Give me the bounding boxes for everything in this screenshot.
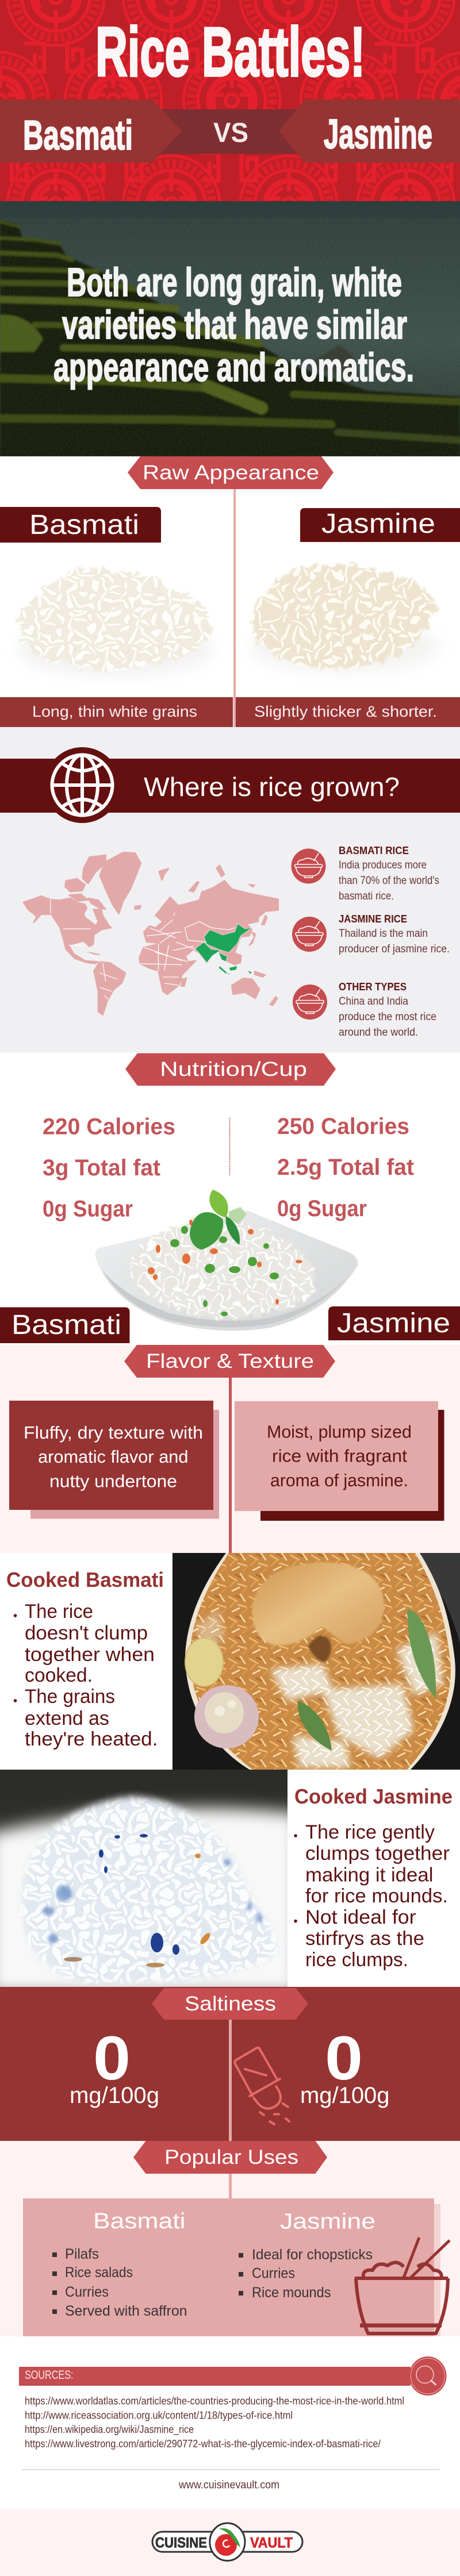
list: basmati uses: Pilafs xyxy=(65,2246,99,2262)
bullet list: together when xyxy=(25,1644,155,1666)
legend: basmati rice: India produces more xyxy=(339,859,427,871)
card: basmati flavor xyxy=(9,1401,219,1518)
nutrition facts: basmati: 3g Total fat xyxy=(43,1155,160,1181)
bullet list: they're heated. xyxy=(25,1728,158,1750)
bullet list: making it ideal xyxy=(305,1864,434,1886)
heading band xyxy=(0,759,460,813)
card: basmati flavor: Fluffy, dry texture with xyxy=(24,1422,203,1443)
icon: salt shaker xyxy=(235,2048,289,2124)
rice terrace photo with intro text xyxy=(0,201,460,456)
bullet list: stirfrys as the xyxy=(305,1928,424,1950)
stat: jasmine saltiness: mg/100g xyxy=(300,2083,390,2108)
caption: jasmine xyxy=(236,697,460,727)
list: basmati uses: Rice salads xyxy=(65,2264,133,2281)
footer xyxy=(0,2509,460,2576)
bullet list: The grains xyxy=(25,1686,115,1708)
heading: Cooked Jasmine xyxy=(294,1785,453,1808)
list: jasmine uses: Ideal for chopsticks xyxy=(252,2247,373,2263)
versus label: VS xyxy=(213,118,248,148)
heading pill: Popular Uses: Popular Uses xyxy=(164,2146,298,2169)
list: jasmine uses xyxy=(239,2247,373,2301)
nutrition facts: basmati: 220 Calories xyxy=(43,1114,175,1139)
tab: Basmati: Basmati xyxy=(12,1310,121,1340)
list: basmati uses xyxy=(52,2246,187,2319)
list: jasmine uses: Rice mounds xyxy=(252,2285,331,2301)
tab: Jasmine xyxy=(300,508,460,542)
sources bar: SOURCES: xyxy=(25,2369,74,2382)
section: raw appearance xyxy=(0,456,460,727)
photo: jasmine rice mound xyxy=(0,1770,288,1987)
list: jasmine uses: Curries xyxy=(252,2266,295,2282)
bullet list: rice clumps. xyxy=(305,1949,408,1971)
source links: https://en.wikipedia.org/wiki/Jasmine_rice xyxy=(25,2424,194,2436)
heading: Cooked Basmati xyxy=(6,1568,164,1591)
nutrition facts: jasmine: 0g Sugar xyxy=(277,1196,367,1221)
heading pill: Saltiness xyxy=(152,1988,308,2020)
stat: basmati saltiness xyxy=(70,2023,159,2108)
heading pill: Flavor & Texture: Flavor & Texture xyxy=(146,1350,314,1372)
legend: jasmine rice: Thailand is the main xyxy=(339,928,428,940)
heading pill: Saltiness: Saltiness xyxy=(185,1993,276,2015)
centre divider xyxy=(233,489,236,727)
logo: Cuisine Vault xyxy=(152,2523,302,2560)
nutrition facts: basmati: 0g Sugar xyxy=(43,1197,133,1222)
section: nutrition xyxy=(0,1052,460,1345)
bullet list: doesn't clump xyxy=(25,1622,148,1644)
card: jasmine flavor xyxy=(235,1401,444,1521)
ribbon right: Jasmine xyxy=(279,99,460,163)
section: saltiness xyxy=(0,1987,460,2141)
legend: basmati rice xyxy=(339,845,439,902)
photo: rice on white plate xyxy=(95,1190,358,1345)
icon: globe xyxy=(44,747,120,823)
bullet list: extend as xyxy=(25,1708,109,1729)
source links: https://www.worldatlas.com/articles/the-countries-producing-the-most-rice-in-the-world.html xyxy=(25,2396,404,2407)
source links xyxy=(25,2396,404,2450)
column heading: Basmati: Basmati xyxy=(93,2209,185,2233)
heading pill: Popular Uses xyxy=(133,2141,327,2174)
bullet list: clumps together xyxy=(305,1843,450,1864)
bullet list: cooked. xyxy=(25,1664,93,1686)
bullet list: for rice mounds. xyxy=(305,1885,448,1907)
nutrition facts: jasmine: 2.5g Total fat xyxy=(277,1155,414,1180)
ribbon centre band xyxy=(155,109,305,154)
column heading: Jasmine: Jasmine xyxy=(280,2209,375,2233)
header banner xyxy=(0,0,460,201)
legend: other types: around the world. xyxy=(339,1026,418,1039)
icon: bowl, jasmine xyxy=(292,917,327,952)
photo: biryani on plate xyxy=(172,1553,460,1770)
tab: Basmati xyxy=(0,507,161,543)
legend: jasmine rice: JASMINE RICE xyxy=(339,913,407,925)
panel: uses xyxy=(23,2198,450,2336)
legend: other types: produce the most rice xyxy=(339,1011,436,1023)
legend: other types: China and India xyxy=(339,995,408,1008)
source links: https://www.livestrong.com/article/290772-what-is-the-glycemic-index-of-basmati-rice/ xyxy=(25,2438,381,2450)
legend: other types xyxy=(339,981,436,1039)
caption: jasmine: Slightly thicker & shorter. xyxy=(254,703,437,720)
sources bar xyxy=(19,2367,411,2386)
photo: raw basmati rice pile xyxy=(15,566,214,675)
legend: basmati rice: basmati rice. xyxy=(339,890,394,902)
section: flavor and texture xyxy=(0,1345,460,1553)
tab: Jasmine: Jasmine xyxy=(337,1308,450,1339)
tab: Jasmine: Jasmine xyxy=(321,509,435,539)
legend: basmati rice: than 70% of the world's xyxy=(339,875,439,887)
stat: basmati saltiness: 0 xyxy=(93,2023,131,2093)
source links: http://www.riceassociation.org.uk/content/1/18/types-of-rice.html xyxy=(25,2409,293,2421)
bullet list xyxy=(14,1601,158,1750)
nutrition facts: jasmine: 250 Calories xyxy=(277,1114,409,1139)
nutrition facts: jasmine xyxy=(277,1114,414,1221)
world map xyxy=(24,852,278,1015)
logo: Cuisine Vault: VAULT xyxy=(250,2535,293,2551)
card: jasmine flavor: rice with fragrant xyxy=(272,1446,407,1466)
icon: bowl, basmati xyxy=(291,848,325,884)
bullet list: The rice gently xyxy=(305,1821,435,1843)
stat: jasmine saltiness: 0 xyxy=(325,2023,363,2093)
heading pill: Raw Appearance: Raw Appearance xyxy=(143,462,319,484)
section: cooked jasmine xyxy=(0,1770,452,1987)
legend: jasmine rice xyxy=(339,913,450,955)
bullet list xyxy=(294,1821,450,1971)
card: jasmine flavor: aroma of jasmine. xyxy=(270,1470,408,1490)
ribbon left: Basmati xyxy=(0,99,182,163)
ribbon left: Basmati: Basmati xyxy=(23,113,133,159)
photo: raw jasmine rice pile xyxy=(249,562,440,672)
legend: basmati rice: BASMATI RICE xyxy=(339,845,409,856)
card: basmati flavor: nutty undertone xyxy=(49,1471,177,1491)
caption: basmati xyxy=(0,697,233,727)
stat: basmati saltiness: mg/100g xyxy=(70,2083,159,2108)
bullet list: The rice xyxy=(25,1601,93,1623)
card: jasmine flavor: Moist, plump sized xyxy=(267,1422,412,1441)
tab: Basmati: Basmati xyxy=(29,510,139,540)
website: www.cuisinevault.com xyxy=(178,2479,279,2491)
section: cooked basmati xyxy=(6,1553,460,1770)
legend: jasmine rice: producer of jasmine rice. xyxy=(339,943,450,955)
heading pill: Nutrition/Cup: Nutrition/Cup xyxy=(160,1058,307,1081)
icon: bowl, other types xyxy=(293,985,327,1020)
heading pill: Nutrition/Cup xyxy=(125,1053,336,1086)
list: basmati uses: Served with saffron xyxy=(65,2303,187,2319)
list: basmati uses: Curries xyxy=(65,2284,109,2300)
logo: Cuisine Vault: CUISINE xyxy=(155,2535,207,2551)
section: where is rice grown xyxy=(0,727,460,1052)
caption: basmati: Long, thin white grains xyxy=(32,703,197,720)
bullet list: Not ideal for xyxy=(305,1906,416,1928)
section: sources xyxy=(19,2356,446,2491)
icon: magnifier xyxy=(409,2356,446,2396)
icon: rice bowl with chopsticks xyxy=(355,2237,450,2333)
legend: other types: OTHER TYPES xyxy=(339,981,407,993)
stat: jasmine saltiness xyxy=(300,2023,390,2108)
heading pill: Raw Appearance xyxy=(128,456,334,489)
heading pill: Flavor & Texture xyxy=(124,1345,335,1378)
section: popular uses xyxy=(0,2141,460,2336)
nutrition facts: basmati xyxy=(43,1114,175,1222)
card: basmati flavor: aromatic flavor and xyxy=(38,1447,189,1467)
intro text xyxy=(53,260,414,390)
heading text: Where is rice grown? xyxy=(144,772,400,802)
tab: Basmati xyxy=(0,1307,130,1343)
